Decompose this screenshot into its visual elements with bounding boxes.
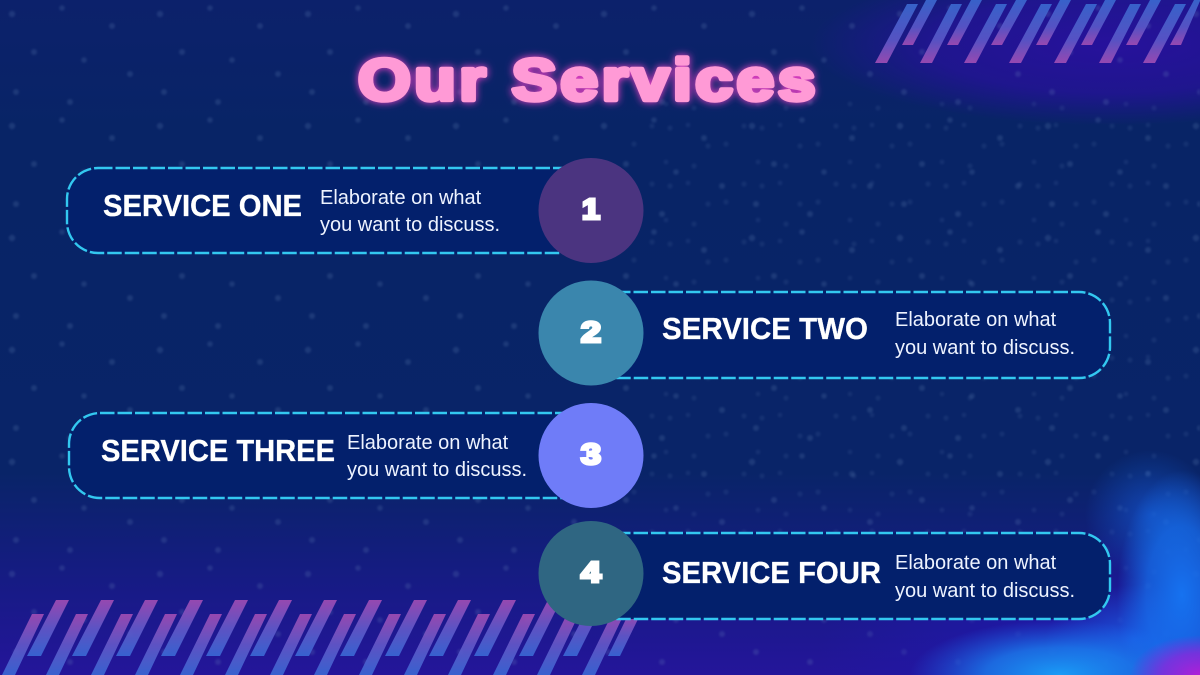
service four row [538,521,1110,626]
service three description [347,432,527,481]
service four description [895,552,1075,602]
service three description: you want to discuss. [347,459,527,481]
number badge 3 [538,403,644,508]
stripes: bottom left [2,600,640,675]
panel: service one [67,168,597,253]
service one description: you want to discuss. [320,214,500,236]
service two description [895,309,1075,359]
service one row [67,158,644,263]
panel: service two [585,292,1110,378]
service one description: Elaborate on what [320,187,482,209]
service two heading: SERVICE TWO [662,311,868,346]
number badge 1: 1 [582,194,600,226]
stripes: top right [875,0,1200,63]
number badge 2: 2 [581,317,601,349]
service one description [320,187,500,236]
service two description: you want to discuss. [895,337,1075,359]
service three heading: SERVICE THREE [101,433,335,468]
service two row [538,280,1110,386]
number badge 2 [538,280,644,386]
panel: service three [69,413,597,498]
glow: bottom right corner [800,450,1200,675]
service one heading: SERVICE ONE [103,188,302,223]
service four heading: SERVICE FOUR [662,555,881,590]
number badge 1 [538,158,644,263]
number badge 3: 3 [581,439,601,471]
number badge 4: 4 [581,557,601,589]
service four description: Elaborate on what [895,552,1057,574]
service three row [69,403,644,508]
service three description: Elaborate on what [347,432,509,454]
number badge 4 [538,521,644,626]
title: Our Services [358,48,819,113]
service four description: you want to discuss. [895,580,1075,602]
panel: service four [585,533,1110,619]
service two description: Elaborate on what [895,309,1057,331]
